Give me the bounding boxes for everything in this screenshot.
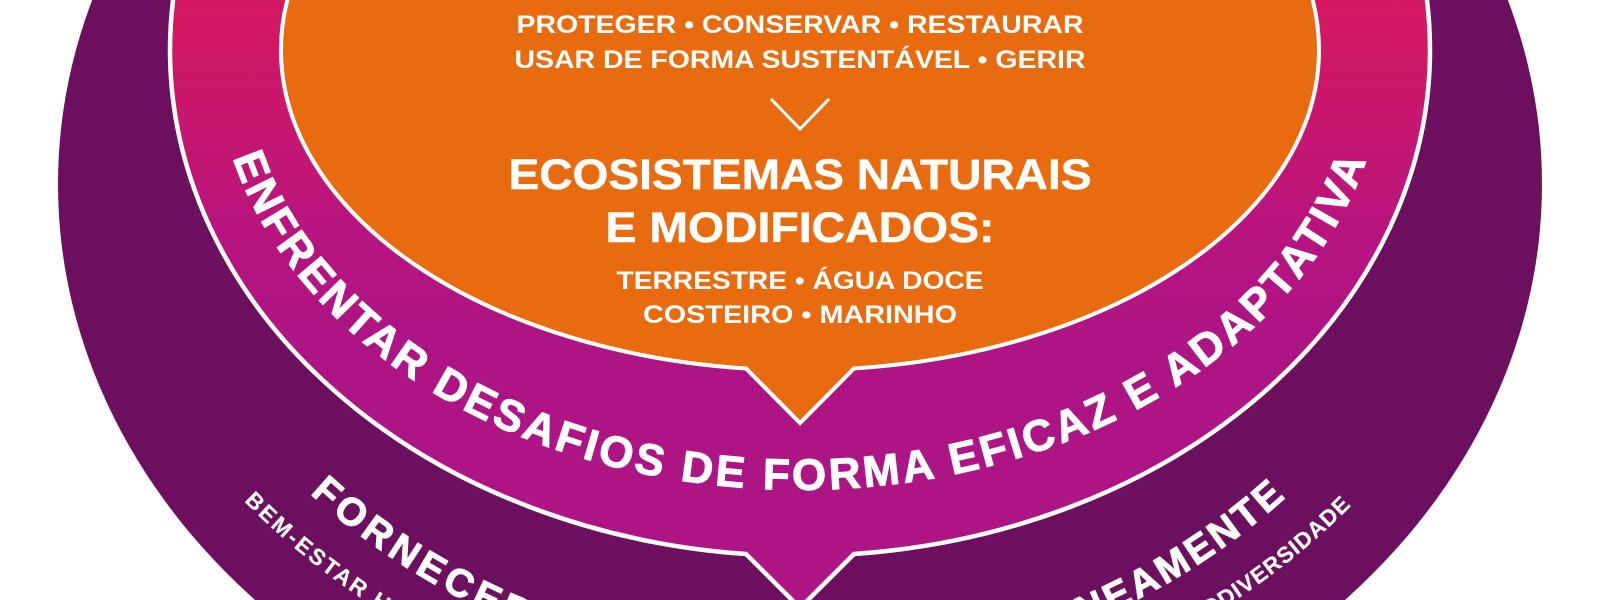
text: actions: USAR DE FORMA SUSTENTÁVEL • GERIR (514, 45, 1086, 74)
heading: ecosystems: ECOSISTEMAS NATURAIS (508, 151, 1092, 199)
text: actions (514, 11, 1086, 74)
middle ring: challenges (170, 0, 1430, 600)
heading: ecosystems: E MODIFICADOS: (606, 204, 994, 252)
text: ecosystem types: TERRESTRE • ÁGUA DOCE (616, 266, 984, 295)
text: actions: PROTEGER • CONSERVAR • RESTAURAR (516, 11, 1084, 39)
heading: ecosystems (508, 151, 1092, 252)
inner panel: actions and ecosystems (281, 0, 1319, 423)
icon: chevron arrow (771, 99, 829, 129)
curved heading: enfrentar desafios: ENFRENTAR DESAFIOS DE FORMA EFICAZ E ADAPTATIVA (233, 149, 1366, 491)
text: ecosystem types: COSTEIRO • MARINHO (643, 301, 957, 329)
text: ecosystem types (616, 266, 984, 329)
